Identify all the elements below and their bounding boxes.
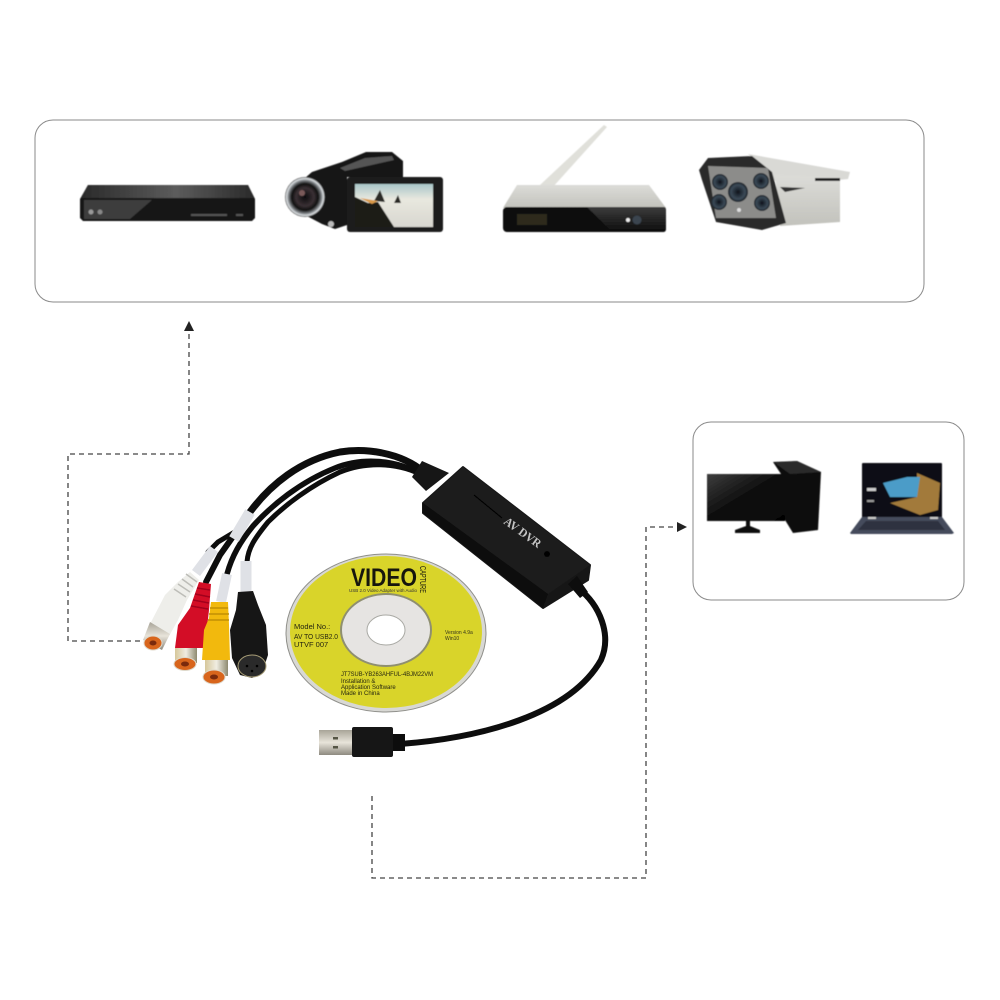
USB cable <box>400 588 605 744</box>
dongle label: AV DVR <box>501 514 545 551</box>
connector: white RCA <box>143 572 199 650</box>
white cable sleeves <box>196 512 250 602</box>
panel: computers <box>693 422 964 600</box>
USB plug <box>319 727 405 757</box>
disc model text: Model No.: <box>294 622 330 631</box>
panel: source devices <box>35 120 924 302</box>
icon: laptop <box>850 463 954 534</box>
disc install text: Installation & <box>341 679 375 685</box>
disc model text: UTVF 007 <box>294 640 328 649</box>
connector: yellow RCA <box>202 602 230 684</box>
cables to RCA and S-video connectors <box>206 451 424 582</box>
disc version text: Version 4.9a <box>445 630 473 636</box>
disc version text: Win10 <box>445 636 459 642</box>
disc install text: JT7SUB-YB263AHFUL-4BJM22VM <box>341 672 433 678</box>
connector: S-video <box>230 591 268 678</box>
disc title: VIDEO <box>351 564 417 592</box>
disc adapter line: USB 2.0 Video Adapter with Audio <box>349 588 417 593</box>
arrow: composite and S-video inputs to source devices <box>68 321 194 641</box>
capture dongle <box>423 467 590 608</box>
icon: desktop computer <box>707 461 821 533</box>
icon: camcorder <box>285 152 443 232</box>
disc subtitle vertical: CAPTURE <box>418 566 427 593</box>
disc install text: Made in China <box>341 691 380 697</box>
disc model text: AV TO USB2.0 <box>294 632 338 641</box>
icon: DVD player <box>80 185 255 221</box>
strain relief <box>412 461 449 491</box>
arrow: USB plug to computers <box>372 522 687 878</box>
connector: red RCA <box>174 582 211 670</box>
icon: security camera <box>699 154 850 230</box>
disc install text: Application Software <box>341 685 396 691</box>
icon: wireless router <box>503 125 666 232</box>
capture cable assembly <box>143 451 605 757</box>
software disc <box>286 554 486 712</box>
